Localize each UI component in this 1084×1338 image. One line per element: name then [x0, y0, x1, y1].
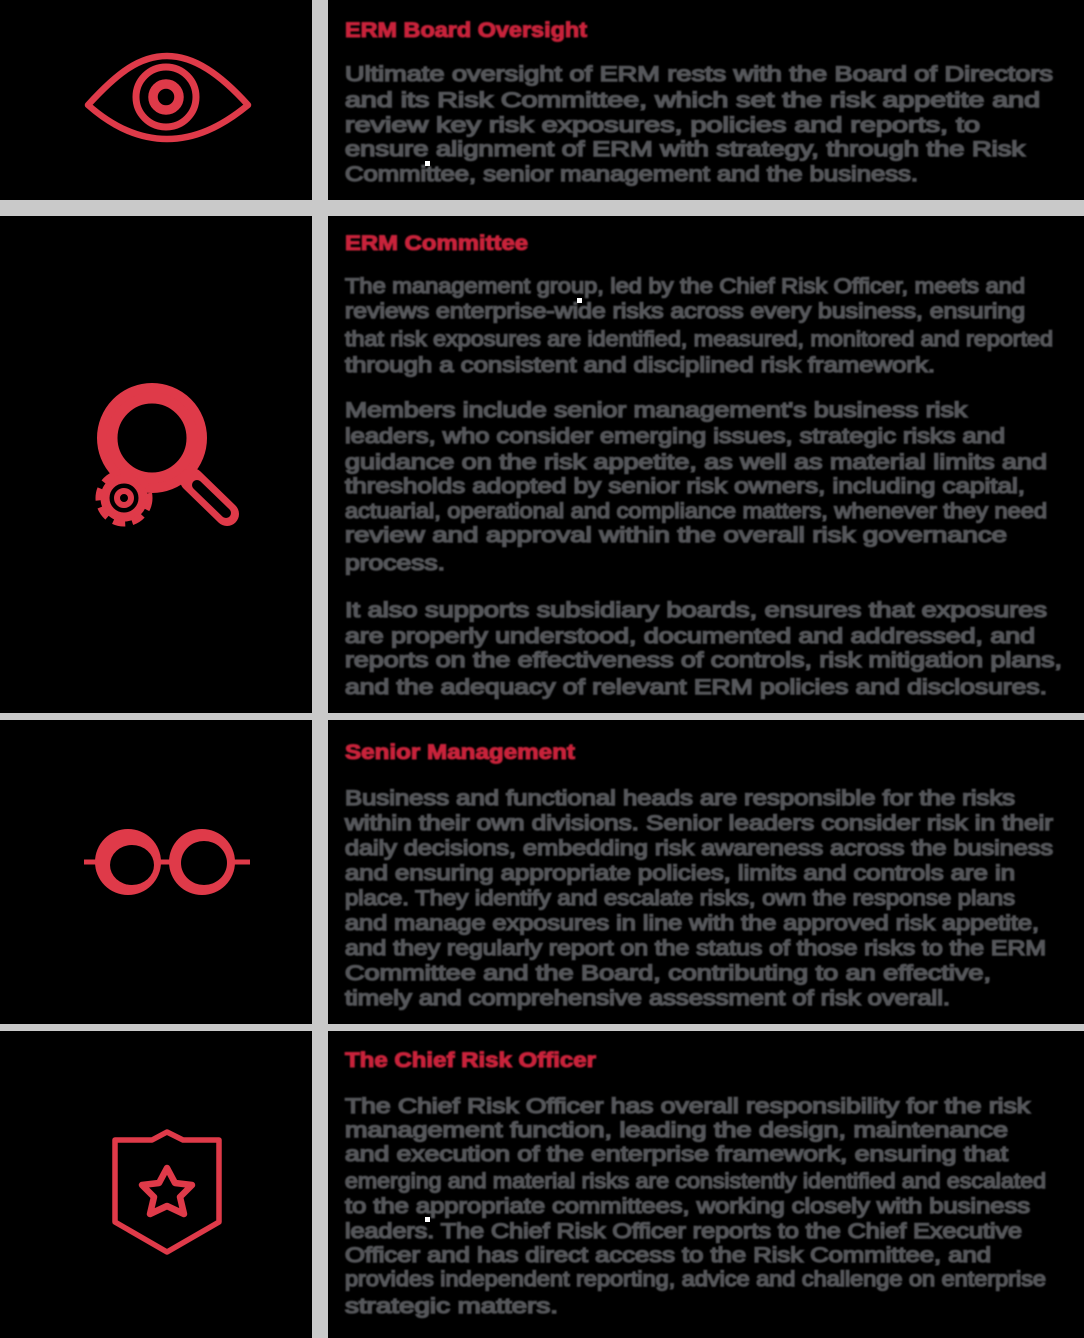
icon: round glasses [84, 829, 250, 895]
text block: committee responsibilities: review and approval within the overall risk governance [345, 524, 1007, 547]
text block: senior management: Business and functional heads are responsible for the risks [345, 787, 1015, 810]
icon: shield with star [115, 1132, 219, 1252]
heading: The Chief Risk Officer: The Chief Risk Officer [345, 1049, 596, 1072]
text block: committee role: through a consistent and disciplined risk framework. [345, 354, 935, 377]
text block: committee reporting: It also supports subsidiary boards, ensures that exposures [345, 599, 1047, 622]
text block: board oversight: and its Risk Committee, which set the risk appetite and [345, 89, 1040, 112]
text block: committee reporting: are properly understood, documented and addressed, and [345, 625, 1035, 648]
text block: chief risk officer: strategic matters. [345, 1295, 558, 1318]
panel: Senior Management [84, 741, 1053, 1010]
text block: committee responsibilities: actuarial, operational and compliance matters, whenever they need [345, 500, 1047, 523]
text block: chief risk officer: The Chief Risk Officer has overall responsibility for the risk [345, 1095, 1031, 1118]
text block: committee responsibilities: leaders, who consider emerging issues, strategic risks and [345, 425, 1005, 448]
text block: chief risk officer: Officer and has direct access to the Risk Committee, and [345, 1244, 991, 1267]
text block: senior management: place. They identify and escalate risks, own the response plans [345, 887, 1015, 910]
text block: senior management [344, 787, 1053, 1010]
text block: committee responsibilities [345, 399, 1047, 575]
heading: Senior Management: Senior Management [345, 741, 575, 764]
panel: The Chief Risk Officer [115, 1049, 1046, 1318]
text block: chief risk officer: to the appropriate committees, working closely with business [345, 1195, 1030, 1218]
text block: committee responsibilities: Members include senior management's business risk [345, 399, 968, 422]
text block: committee role [345, 275, 1053, 377]
panel: ERM Board Oversight [88, 19, 1053, 186]
text block: senior management: and they regularly report on the status of those risks to the ERM [345, 937, 1046, 960]
text block: committee reporting [345, 599, 1062, 699]
text block: chief risk officer: emerging and material risks are consistently identified and escalated [345, 1170, 1046, 1193]
text block: board oversight: Committee, senior management and the business. [345, 163, 918, 186]
text block: chief risk officer: management function, leading the design, maintenance [345, 1119, 1008, 1142]
icon: magnifying glass with gear [99, 388, 227, 523]
text block: committee responsibilities: process. [345, 552, 445, 575]
heading: ERM Committee: ERM Committee [345, 232, 528, 255]
text block: board oversight: Ultimate oversight of ERM rests with the Board of Directors [345, 63, 1053, 86]
text block: senior management: daily decisions, embedding risk awareness across the business [345, 837, 1053, 860]
text block: senior management: and ensuring appropriate policies, limits and controls are in [345, 862, 1015, 885]
text block: chief risk officer: provides independent reporting, advice and challenge on enterprise [345, 1268, 1046, 1291]
text block: board oversight: ensure alignment of ERM with strategy, through the Risk [345, 138, 1026, 161]
text block: committee responsibilities: guidance on the risk appetite, as well as material limits and [345, 451, 1047, 474]
text block: committee role: reviews enterprise-wide risks across every business, ensuring [345, 300, 1025, 323]
text block: committee role: that risk exposures are identified, measured, monitored and reported [345, 328, 1053, 351]
text block: board oversight: review key risk exposures, policies and reports, to [345, 114, 980, 137]
icon: eye [88, 56, 248, 139]
text block: committee role: The management group, led by the Chief Risk Officer, meets and [345, 275, 1025, 298]
text block: chief risk officer [345, 1095, 1046, 1318]
text block: committee reporting: reports on the effectiveness of controls, risk mitigation plans, [345, 649, 1062, 672]
text block: senior management: Committee and the Board, contributing to an effective, [345, 962, 991, 985]
text block: senior management: and manage exposures in line with the approved risk appetite, [345, 912, 1039, 935]
text block: senior management: timely and comprehensive assessment of risk overall. [345, 987, 950, 1010]
text block: committee reporting: and the adequacy of relevant ERM policies and disclosures. [345, 676, 1047, 699]
panel: ERM Committee [99, 232, 1062, 699]
text block: committee responsibilities: thresholds adopted by senior risk owners, including capital, [345, 475, 1025, 498]
text block: chief risk officer: leaders. The Chief Risk Officer reports to the Chief Executive [345, 1220, 1022, 1243]
text block: senior management: within their own divisions. Senior leaders consider risk in their [344, 812, 1053, 835]
text block: chief risk officer: and execution of the enterprise framework, ensuring that [345, 1143, 1008, 1166]
heading: ERM Board Oversight: ERM Board Oversight [345, 19, 587, 42]
text block: board oversight [345, 63, 1053, 186]
